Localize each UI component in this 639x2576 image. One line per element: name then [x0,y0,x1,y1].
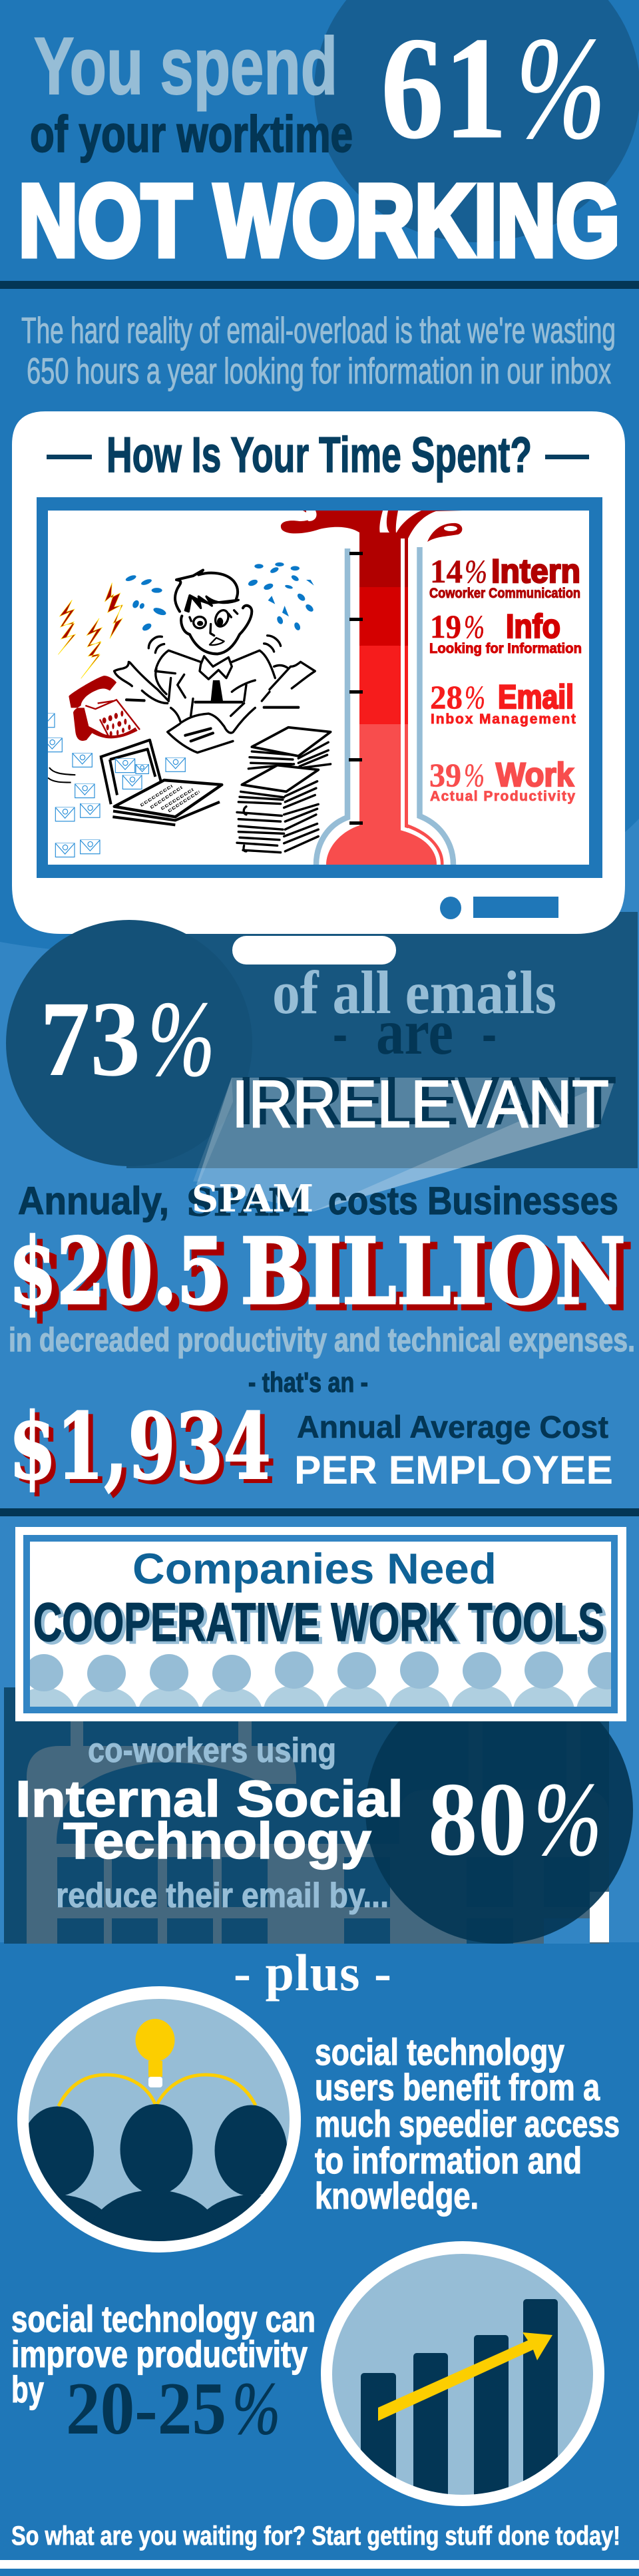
text: per employee: PER EMPLOYEE [294,1448,613,1492]
text: reduce their email: reduce their email by... [56,1876,389,1915]
bulb outer reflection [406,825,442,865]
illustration: overwhelmed worker [35,562,331,857]
icon: lightning bolts [58,583,122,678]
monitor stand [232,936,396,965]
header panel [19,0,639,278]
stat: $20.5 billion: $20.5 [9,1218,225,1325]
text: speedier access: to information and [315,2139,582,2181]
heading: companies need: Companies Need [132,1544,497,1593]
text: internal social: Internal Social [15,1771,403,1828]
text: annual average cost: Annual Average Cost [297,1409,608,1444]
chart: thermometer [281,511,463,865]
text: are: are [376,996,453,1068]
segment: intern [379,533,397,538]
splash drop [427,523,462,542]
screen [48,511,589,865]
splash drop highlight [444,526,457,531]
text: speedier access: social technology [315,2031,564,2073]
legend: 19% info: Info [506,608,560,645]
legend: 28% email: % [465,678,485,716]
icon: paper stacks [237,728,331,853]
splash highlights [306,511,421,533]
text: that's an: - that's an - [248,1367,368,1398]
text: are [333,996,497,1068]
bulb neck [148,2061,162,2077]
stat: 61: 61 [381,7,507,169]
panel: 73% [6,920,616,1211]
panel: 73% irrelevant background [126,912,638,1168]
monitor panel [12,411,625,934]
divider [0,281,639,289]
legend: 39% work: Actual Productivity [430,789,575,804]
panel: spam costs [9,1177,635,1504]
circle behind 73% [6,920,252,1166]
legend: 28% email: 28 [430,678,463,716]
intro text [21,310,616,391]
monitor button [440,897,461,919]
bulb base [148,2077,162,2087]
bulb [136,2019,174,2061]
heading: of your worktime: of your worktime [30,106,353,163]
stat: 73: 73 [40,980,140,1099]
splash top [281,511,462,538]
icon: team with idea [17,1986,301,2253]
stat: 20-25: 20-25 [66,2368,226,2450]
footer bar [0,2560,639,2569]
icon: motion lines [48,767,75,782]
bulb fill [401,724,408,829]
legend: 39% work: % [464,756,485,793]
legend: 14% intern [429,552,580,601]
text: co-workers using: co-workers using [88,1731,336,1770]
legend: 28% email: Inbox Management [431,712,576,727]
text: technology: Technology [63,1813,371,1870]
text: are: - [333,996,347,1068]
stat: percent sign: % [148,980,215,1099]
box blue frame [23,1535,618,1713]
monitor body [12,411,625,934]
circle behind 80% [365,1676,633,1944]
stat: percent sign: % [516,7,606,169]
dark circle behind 61% [314,0,639,242]
stat: $20.5 billion [9,1218,626,1325]
text: improve productivity [11,2298,316,2410]
bars [361,2299,558,2495]
text: IRRELEVANT shadow: IRRELEVANT [238,1064,616,1138]
legend: 14% intern: Coworker Communication [429,586,580,601]
icon: laptop [100,740,222,825]
scale ticks [349,552,363,825]
legend: 28% email: Email [498,678,574,716]
glass highlight [403,538,439,865]
legend: 14% intern: 14 [430,552,463,590]
legend: 28% email [430,678,576,727]
legend: 39% work: 39 [429,756,461,793]
building backdrop [4,1687,609,1944]
text: speedier access [315,2031,620,2217]
text: improve productivity: social technology can [11,2298,316,2340]
text: improve productivity: by [11,2368,44,2410]
lighter background wave [0,819,639,1942]
legend: 19% info: % [464,608,485,645]
legend: 39% work: Work [496,756,574,793]
divider [0,1508,639,1516]
heading: plus: - plus - [234,1944,391,2002]
spotlight beam [193,1078,616,1211]
text: speedier access: knowledge. [315,2175,479,2217]
legend: 14% intern: % [465,552,487,590]
legend: 19% info: 19 [430,608,461,645]
box interior [30,1542,611,1707]
icon: man at desk [114,570,315,753]
segment: email [359,646,408,724]
text: annualy: Annualy, [18,1180,169,1223]
people [29,2104,287,2241]
text: SPAM: SPAM [192,1177,314,1221]
stat: percent sign: % [232,2368,280,2450]
title dashes [47,455,589,459]
screen frame [37,497,602,878]
inner disc [29,1999,290,2241]
text: of all emails: of all emails [272,959,556,1026]
arrow [378,2332,552,2421]
ring [17,1986,301,2253]
stat: percent sign: % [534,1761,602,1878]
bottom section background [0,1944,639,2576]
icon: telephone [69,676,140,741]
connecting arcs [59,2075,256,2106]
stat: $20.5 billion shadow [16,1224,633,1331]
panel: internal social technology [4,1676,633,1944]
crowd icons [30,1651,611,1707]
legend: 39% work [429,756,575,804]
box outer frame [15,1527,626,1721]
segment: work and bulb [326,724,437,865]
legend: 19% info: Looking for Information [429,641,582,656]
text: improve productivity: improve productivity [11,2333,308,2375]
stat: $1,934: $1,934 [9,1393,271,1500]
segment: info [359,587,408,646]
icon: email envelopes [35,714,185,857]
ring [321,2241,604,2506]
heading: You spend: You spend [34,21,337,111]
stat: $20.5 billion shadow: $20.5 [16,1224,232,1331]
stat: 80: 80 [428,1761,527,1878]
legend: 19% info [429,608,582,656]
monitor slot [473,897,558,918]
panel: companies need [13,1527,638,1737]
text: are: - [482,996,497,1068]
icon: sweat drops [125,562,315,632]
chart: rising bars icon [321,2241,604,2535]
text: IRRELEVANT: IRRELEVANT [232,1067,609,1142]
legend: 14% intern: Intern [491,552,580,590]
inner disc [332,2254,593,2495]
stat: $1,934 shadow: $1,934 [13,1397,276,1504]
text: SPAM shadow: SPAM [186,1181,310,1225]
thermometer glass [316,547,453,865]
